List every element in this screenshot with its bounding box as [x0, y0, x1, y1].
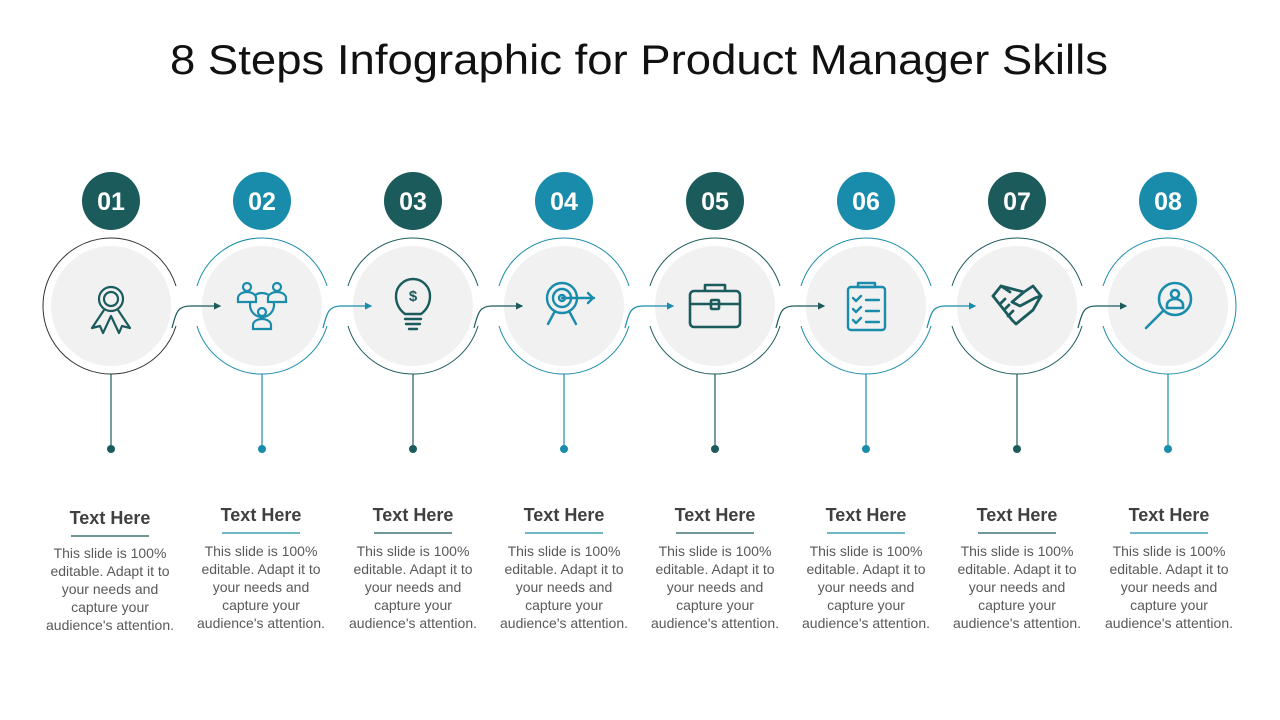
- text block 06: [802, 505, 930, 631]
- text block 05: your needs and: [667, 579, 763, 595]
- text block 01: audience's attention.: [46, 617, 174, 633]
- text block 02: editable. Adapt it to: [201, 561, 321, 577]
- text block 04: capture your: [525, 597, 603, 613]
- text block 05: audience's attention.: [651, 615, 779, 631]
- text block 04: editable. Adapt it to: [504, 561, 624, 577]
- text block 01: Text Here: [70, 508, 150, 528]
- step 02: 02: [248, 188, 276, 216]
- icon: team: [238, 283, 286, 329]
- text block 01: editable. Adapt it to: [50, 563, 170, 579]
- text block 05: capture your: [676, 597, 754, 613]
- step 04: [499, 172, 629, 453]
- text block 06: This slide is 100%: [810, 543, 922, 559]
- text block 08: audience's attention.: [1105, 615, 1233, 631]
- icon: award ribbon: [92, 287, 130, 333]
- text block 04: This slide is 100%: [508, 543, 620, 559]
- text block 03: audience's attention.: [349, 615, 477, 631]
- text block 07: Text Here: [977, 505, 1057, 525]
- step 01: [43, 172, 176, 453]
- connectors: [172, 306, 1126, 328]
- text blocks: [46, 505, 1233, 633]
- text block 02: your needs and: [213, 579, 309, 595]
- text block 02: [197, 505, 325, 631]
- text block 06: your needs and: [818, 579, 914, 595]
- text block 01: capture your: [71, 599, 149, 615]
- text block 01: [46, 508, 174, 633]
- step 07: [952, 172, 1082, 453]
- text block 07: [953, 505, 1081, 631]
- text block 02: Text Here: [221, 505, 301, 525]
- text block 08: editable. Adapt it to: [1109, 561, 1229, 577]
- text block 03: Text Here: [373, 505, 453, 525]
- icon: handshake: [993, 286, 1041, 324]
- text block 05: Text Here: [675, 505, 755, 525]
- step 06: 06: [852, 188, 880, 216]
- text block 08: your needs and: [1121, 579, 1217, 595]
- text block 06: audience's attention.: [802, 615, 930, 631]
- text block 06: capture your: [827, 597, 905, 613]
- step 03: [348, 172, 478, 453]
- icon: target: [547, 283, 594, 324]
- step 05: 05: [701, 188, 729, 216]
- step 07: 07: [1003, 188, 1031, 216]
- text block 08: This slide is 100%: [1113, 543, 1225, 559]
- text block 08: Text Here: [1129, 505, 1209, 525]
- icon: magnifier person: [1146, 283, 1191, 328]
- step 01: 01: [97, 188, 125, 216]
- text block 07: capture your: [978, 597, 1056, 613]
- text block 08: capture your: [1130, 597, 1208, 613]
- text block 03: your needs and: [365, 579, 461, 595]
- text block 02: capture your: [222, 597, 300, 613]
- text block 06: Text Here: [826, 505, 906, 525]
- text block 02: This slide is 100%: [205, 543, 317, 559]
- text block 07: your needs and: [969, 579, 1065, 595]
- text block 04: your needs and: [516, 579, 612, 595]
- icon: lightbulb dollar: $: [409, 288, 418, 305]
- text block 05: editable. Adapt it to: [655, 561, 775, 577]
- step 06: [801, 172, 931, 453]
- text block 03: This slide is 100%: [357, 543, 469, 559]
- text block 04: Text Here: [524, 505, 604, 525]
- title: 8 Steps Infographic for Product Manager Skills: [170, 36, 1108, 83]
- text block 04: [500, 505, 628, 631]
- step 02: [197, 172, 327, 453]
- text block 02: audience's attention.: [197, 615, 325, 631]
- icon: lightbulb dollar: [396, 279, 430, 329]
- step 08: 08: [1154, 188, 1182, 216]
- text block 01: This slide is 100%: [54, 545, 166, 561]
- text block 05: [651, 505, 779, 631]
- text block 07: audience's attention.: [953, 615, 1081, 631]
- step 05: [650, 172, 780, 453]
- icon: briefcase: [690, 285, 740, 327]
- icon: clipboard: [848, 283, 885, 330]
- text block 03: editable. Adapt it to: [353, 561, 473, 577]
- text block 03: [349, 505, 477, 631]
- text block 07: editable. Adapt it to: [957, 561, 1077, 577]
- text block 07: This slide is 100%: [961, 543, 1073, 559]
- text block 01: your needs and: [62, 581, 158, 597]
- step 03: 03: [399, 188, 427, 216]
- step 08: [1103, 172, 1236, 453]
- step 04: 04: [550, 188, 578, 216]
- text block 05: This slide is 100%: [659, 543, 771, 559]
- text block 06: editable. Adapt it to: [806, 561, 926, 577]
- text block 04: audience's attention.: [500, 615, 628, 631]
- text block 03: capture your: [374, 597, 452, 613]
- text block 08: [1105, 505, 1233, 631]
